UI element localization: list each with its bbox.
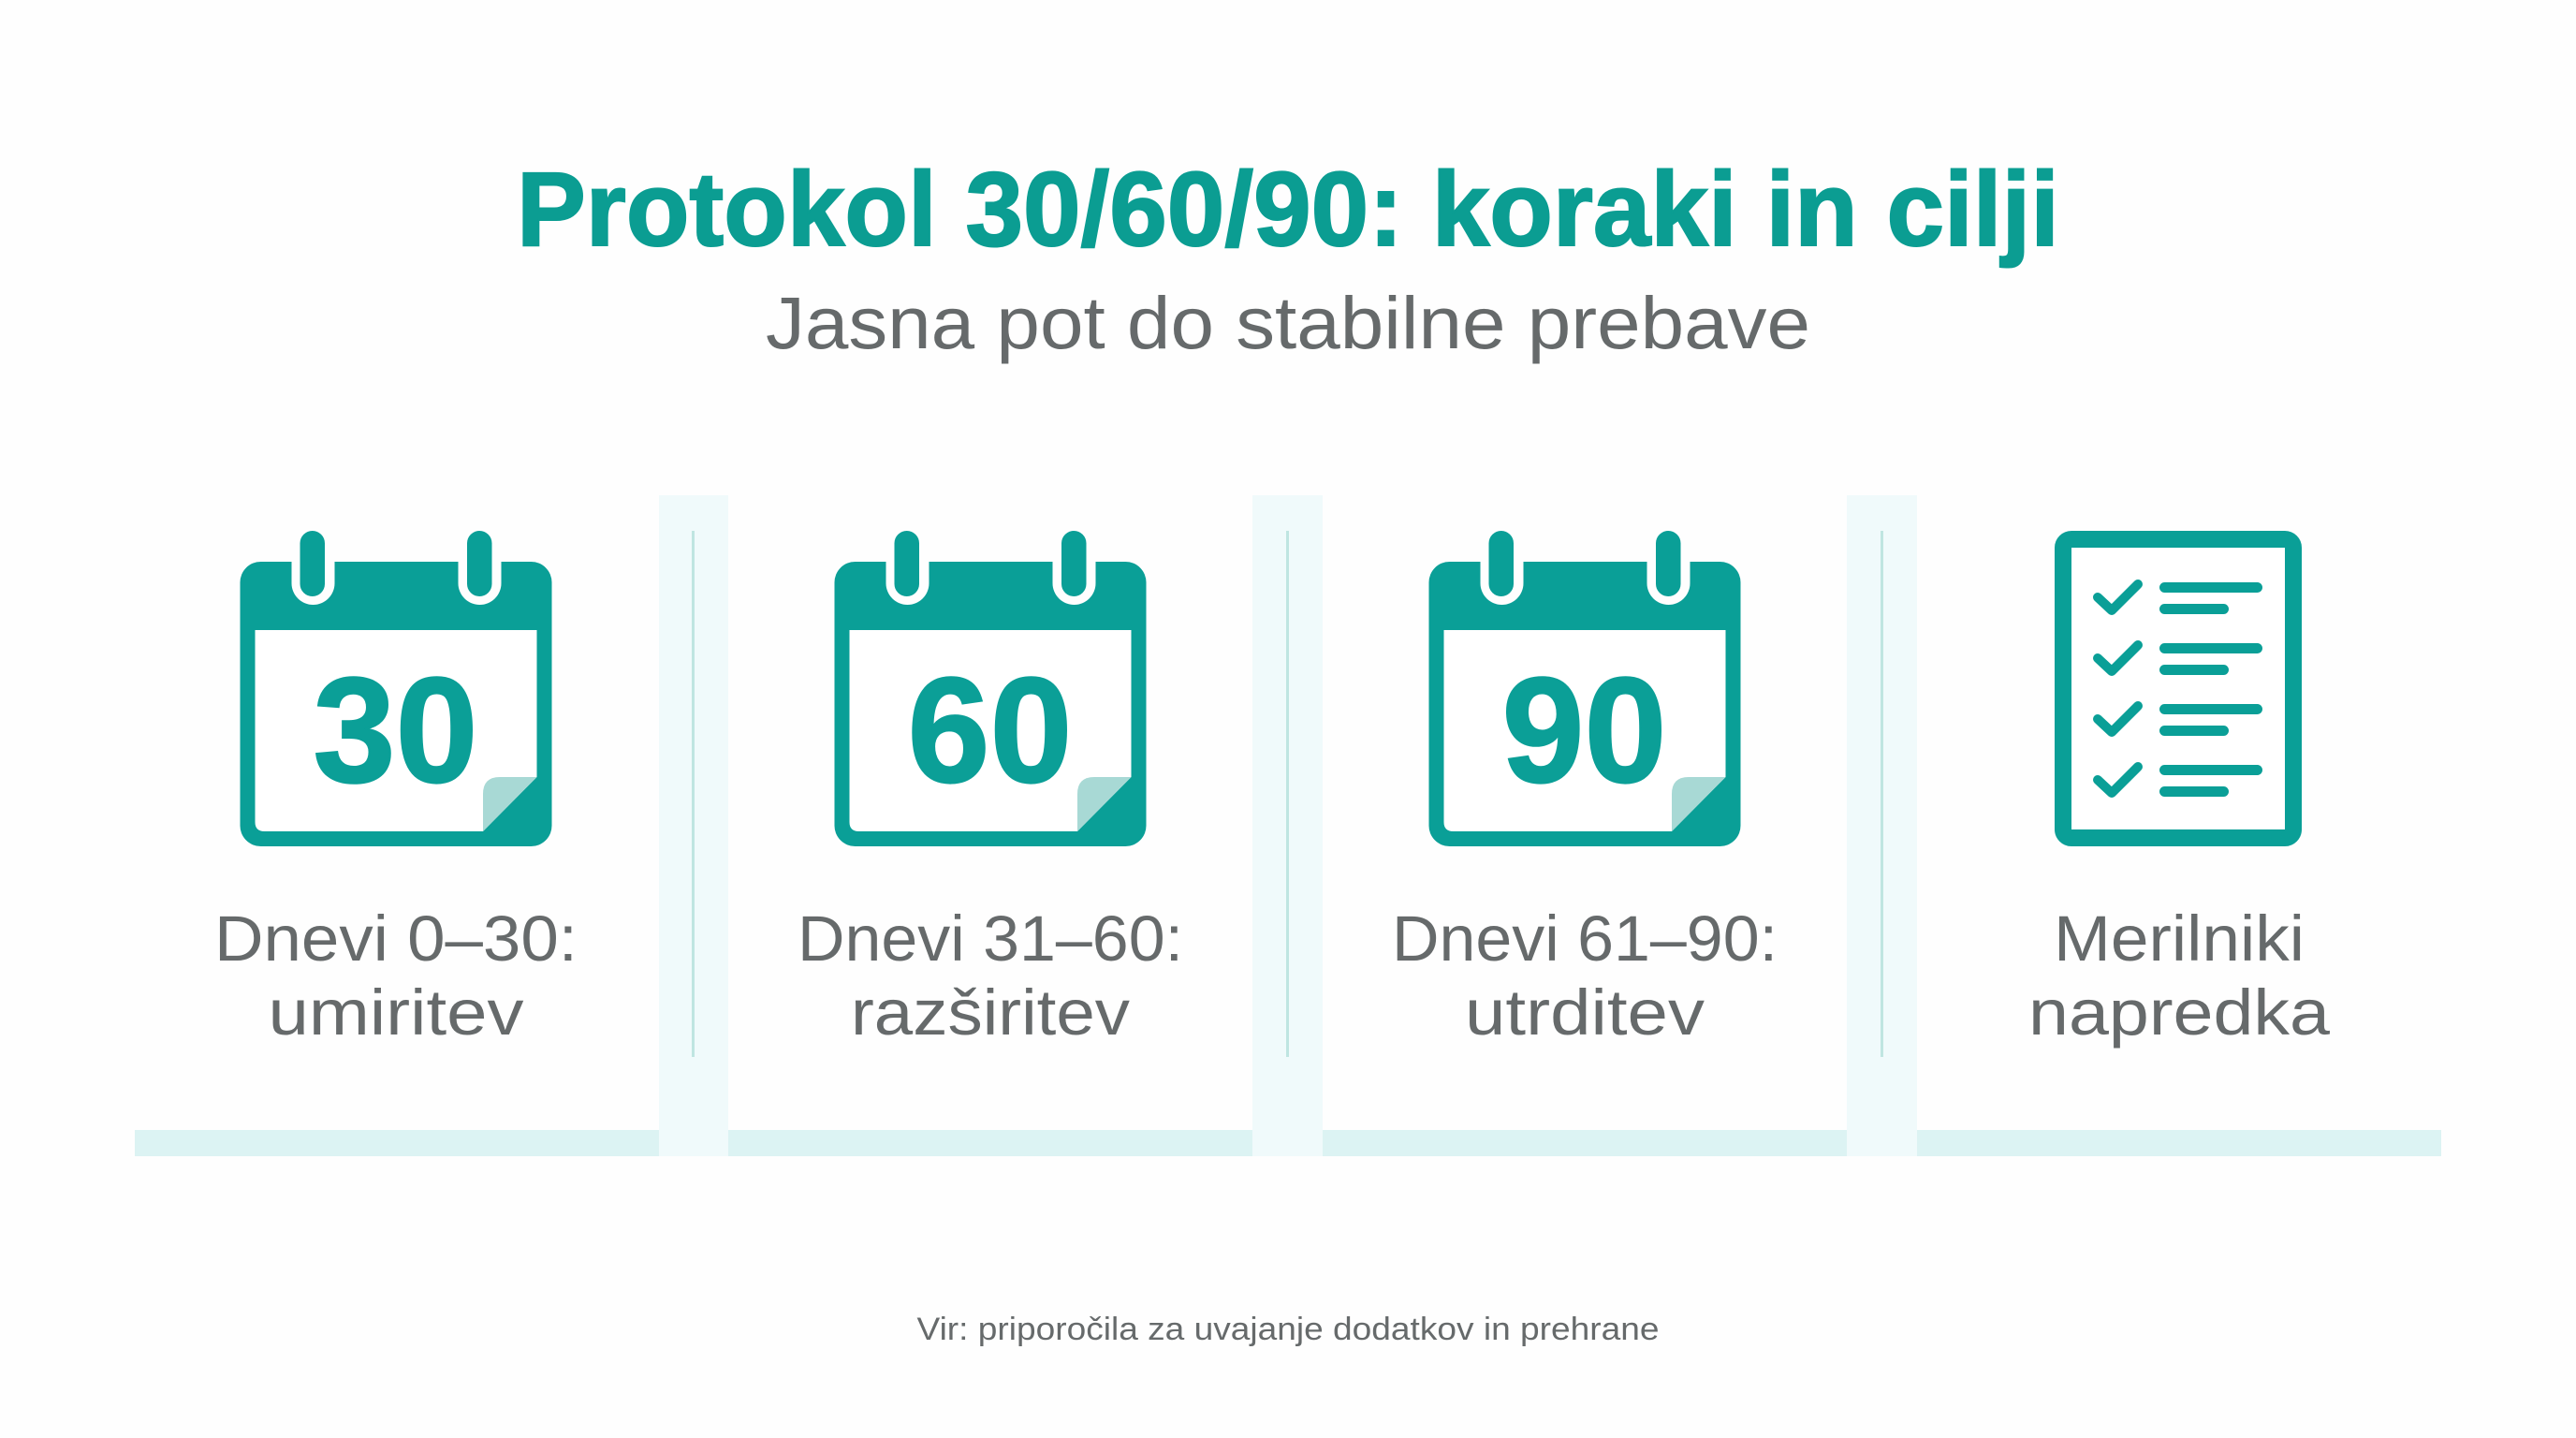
source note: Vir: priporočila za uvajanje dodatkov in prehrane: [917, 1312, 1659, 1347]
label: Dnevi 0–30:: [214, 902, 578, 975]
label: napredka: [2028, 976, 2331, 1049]
panel: days 0-30: [214, 531, 578, 1049]
icon: calendar 30: 30: [313, 646, 477, 814]
icon: calendar 90: [1428, 531, 1741, 846]
label: razširitev: [851, 976, 1131, 1049]
panel: days 61-90: [1392, 531, 1778, 1049]
icon: calendar 60: [835, 531, 1146, 846]
icon: calendar 30: [240, 531, 552, 846]
baseline track: [135, 1130, 2441, 1156]
column divider 1: [659, 495, 728, 1156]
panel: days 31-60: [798, 531, 1183, 1049]
label: Merilniki: [2054, 902, 2305, 975]
column divider 3: [1847, 495, 1917, 1156]
icon: calendar 60: 60: [908, 646, 1073, 814]
title: Protokol 30/60/90: koraki in cilji: [517, 151, 2059, 268]
column divider 2: [1252, 495, 1323, 1156]
panel: progress metrics: [2028, 539, 2331, 1049]
label: Dnevi 31–60:: [798, 902, 1183, 975]
label: utrditev: [1465, 976, 1705, 1049]
label: umiritev: [268, 976, 524, 1049]
icon: checklist: [2063, 539, 2293, 838]
icon: calendar 90: 90: [1501, 646, 1666, 814]
subtitle: Jasna pot do stabilne prebave: [766, 281, 1810, 364]
label: Dnevi 61–90:: [1392, 902, 1778, 975]
